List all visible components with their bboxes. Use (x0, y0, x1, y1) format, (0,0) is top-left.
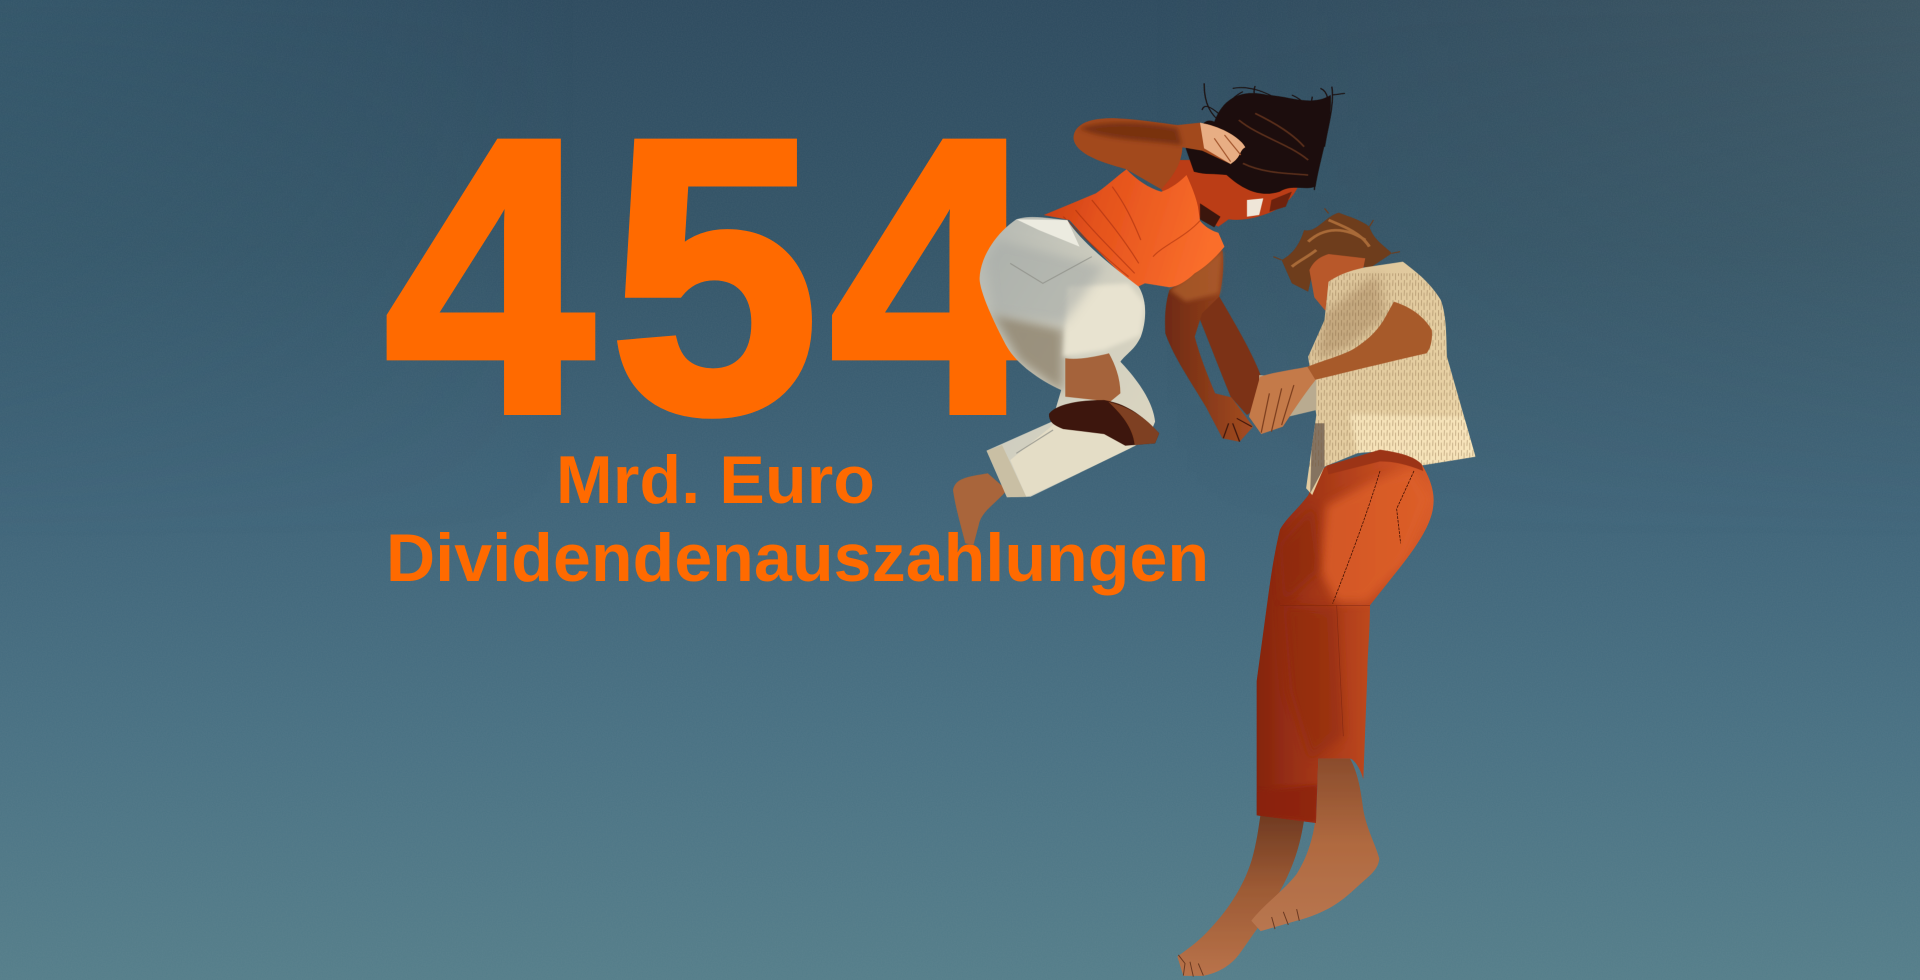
big number 454: 454 (385, 59, 1041, 495)
woman's neck and face (1161, 160, 1298, 227)
man's hair (1273, 208, 1400, 292)
man's face (1309, 254, 1365, 311)
man's front leg and foot (1251, 759, 1379, 931)
label: Mrd. Euro: Mrd. Euro (556, 442, 875, 518)
man's sleeve underside (1259, 375, 1316, 418)
man's arm (1307, 302, 1432, 380)
woman's rear arm (1199, 295, 1261, 415)
woman's front arm and hand (1165, 250, 1253, 442)
man's red trousers (1257, 450, 1434, 823)
photo: man's waistband over shirt hem (1327, 450, 1423, 474)
woman's raised foot (1049, 353, 1159, 446)
woman's light jeans (980, 217, 1155, 497)
label: Dividendenauszahlungen: Dividendenauszahlungen (386, 520, 1209, 596)
man's shirt (1306, 262, 1480, 495)
photo: man jumping, lower body (1177, 450, 1434, 977)
man's rear leg and foot (1177, 814, 1304, 977)
woman's orange top (1044, 169, 1224, 287)
man's hand (1249, 367, 1316, 434)
woman's raised arm and hand (1073, 118, 1245, 189)
photo: both figures, upper body (953, 83, 1480, 545)
woman's lower foot (953, 473, 1007, 545)
woman's hair (1186, 83, 1345, 194)
